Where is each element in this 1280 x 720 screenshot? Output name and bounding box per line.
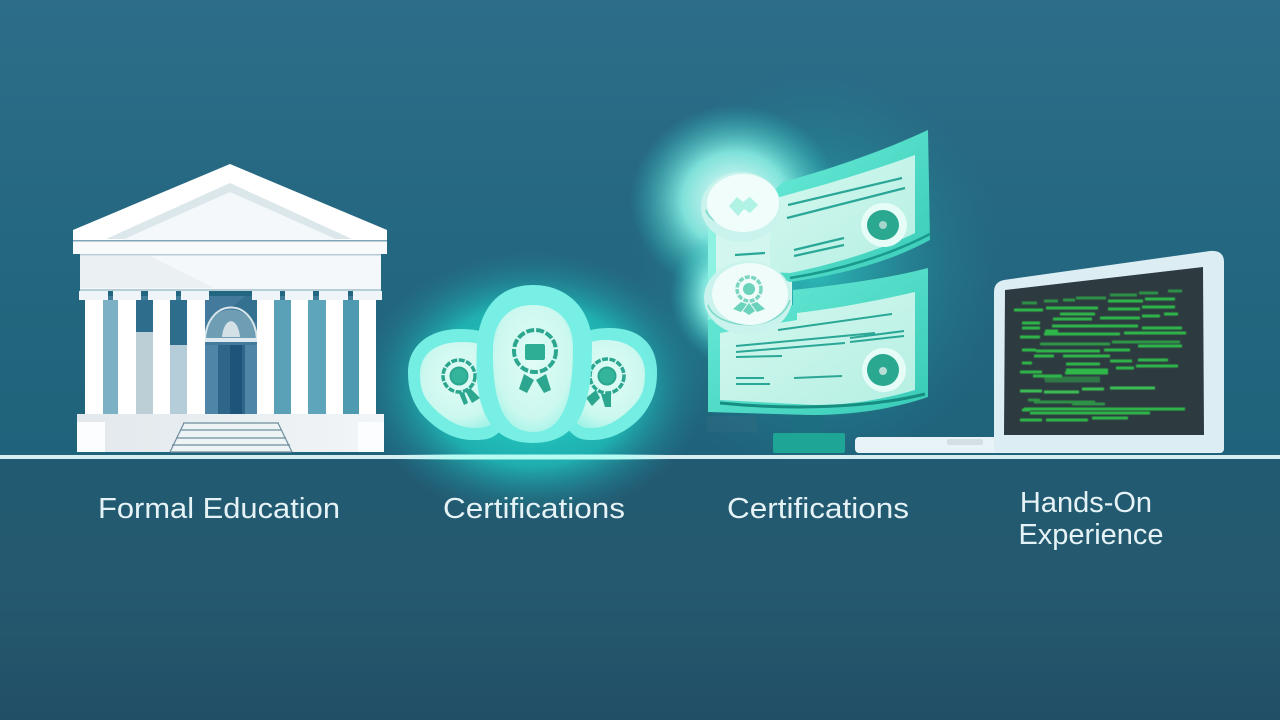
base and steps	[77, 414, 384, 452]
label: Certifications: Certifications	[727, 493, 909, 525]
lower certificate	[708, 268, 928, 415]
background: upper wall	[0, 0, 1280, 456]
icon: glowing certification badges	[358, 250, 708, 520]
label: Formal Education: Formal Education	[98, 493, 340, 525]
label: Hands-On Experience: Experience	[1018, 519, 1164, 551]
screen	[1004, 267, 1204, 435]
floor line	[0, 454, 1280, 460]
laptop lid	[994, 251, 1224, 452]
right badge	[565, 328, 657, 440]
columns	[79, 291, 382, 414]
upper medallion	[701, 172, 781, 242]
left badge	[408, 329, 505, 440]
code lines	[1014, 291, 1186, 420]
seal	[862, 348, 906, 392]
laptop base	[855, 437, 1224, 453]
center badge	[476, 285, 592, 443]
label: Hands-On Experience: Hands-On	[1020, 487, 1152, 519]
rosette icon	[514, 330, 556, 393]
joined paper between medallions	[716, 215, 792, 335]
left frame joining both certificates	[708, 215, 792, 335]
rosette icon	[586, 359, 624, 407]
lower medallion	[704, 261, 792, 335]
background: lower panel	[0, 459, 1280, 720]
upper certificate	[735, 130, 930, 282]
doorway with arch	[204, 308, 258, 414]
label: Certifications: Certifications	[443, 493, 625, 525]
monitor stand	[707, 415, 845, 453]
icon: certificate stack on monitor	[625, 65, 1005, 475]
icon: classical building	[73, 164, 387, 452]
seal	[861, 203, 907, 247]
entablature	[73, 240, 387, 291]
portico shadow	[103, 296, 359, 414]
icon: laptop with code	[855, 251, 1224, 453]
roof pediment	[73, 164, 387, 241]
rosette icon	[443, 360, 480, 405]
